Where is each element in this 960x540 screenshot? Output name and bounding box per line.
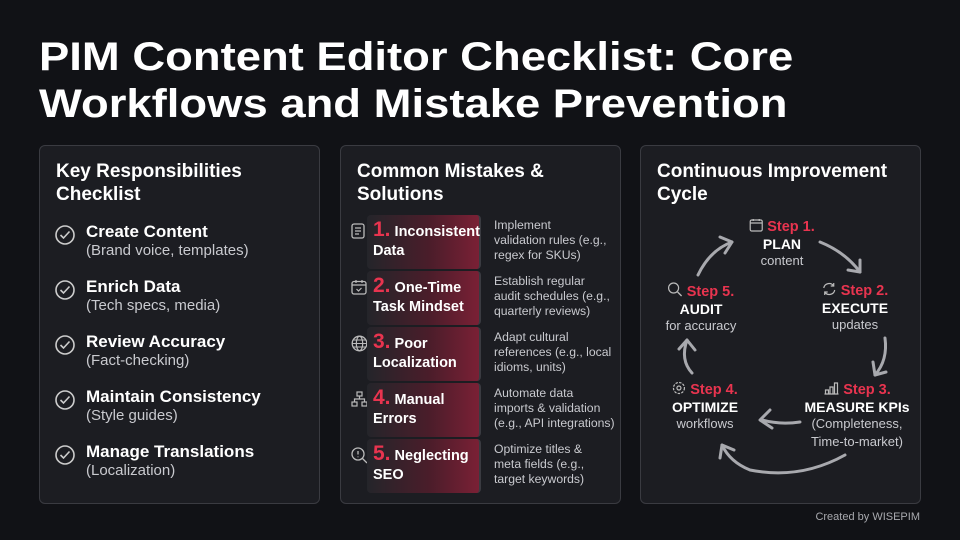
row 2: 2. One-Time Task Mindset	[373, 274, 464, 315]
step 2: updates	[832, 317, 878, 332]
heading: cycle: Cycle	[657, 184, 708, 205]
step 4: Step 4.	[690, 382, 738, 398]
step 5	[666, 282, 736, 333]
step 1	[750, 219, 815, 268]
title: Workflows and Mistake Prevention	[39, 82, 787, 126]
step 4: workflows	[676, 416, 734, 431]
step 3: MEASURE KPIs	[804, 398, 910, 414]
item: review accuracy	[55, 332, 226, 369]
panel: key responsibilities: Manage Translations	[86, 442, 254, 461]
row 1: regex for SKUs)	[494, 248, 581, 262]
row 5: target keywords)	[494, 472, 584, 486]
row 4: 4. Manual Errors	[373, 386, 444, 427]
title: PIM Content Editor Checklist: Core	[39, 35, 793, 79]
panel: key responsibilities: (Style guides)	[86, 407, 178, 424]
panel: key responsibilities: Maintain Consistency	[86, 387, 261, 406]
heading: mistakes	[357, 161, 544, 205]
row 2: audit schedules (e.g.,	[494, 289, 610, 303]
title	[39, 35, 793, 126]
row 4: Automate data	[494, 386, 573, 400]
row 5: Optimize titles &	[494, 442, 582, 456]
row 2: Establish regular	[494, 274, 585, 288]
heading: mistakes: Common Mistakes &	[357, 161, 544, 182]
row 3: 3. Poor Localization	[373, 330, 457, 371]
panel: key responsibilities: (Fact-checking)	[86, 352, 189, 369]
step 2: EXECUTE	[822, 300, 888, 316]
step 1: content	[761, 253, 803, 268]
panel: key responsibilities	[39, 145, 320, 504]
step 2: Step 2.	[841, 283, 888, 299]
heading: cycle: Continuous Improvement	[657, 161, 887, 182]
panel: key responsibilities: Review Accuracy	[86, 332, 225, 351]
heading: responsibilities	[56, 161, 242, 205]
item: manage translations	[55, 442, 254, 479]
row 1: 1. Inconsistent Data	[373, 218, 480, 259]
row 3: Adapt cultural	[494, 330, 569, 344]
step 5: for accuracy	[666, 318, 736, 333]
cycle arrows	[677, 236, 888, 474]
row 1: validation rules (e.g.,	[494, 233, 606, 247]
step 4: OPTIMIZE	[672, 398, 738, 414]
row 1: Implement	[494, 218, 551, 232]
row 2: quarterly reviews)	[494, 304, 590, 318]
panel: key responsibilities: (Localization)	[86, 462, 175, 479]
panel: key responsibilities: Enrich Data	[86, 277, 180, 296]
row 4	[351, 383, 615, 437]
step 1: Step 1.	[767, 219, 815, 235]
step 4	[672, 382, 738, 431]
row 3: references (e.g., local	[494, 345, 611, 359]
step 3: Step 3.	[843, 382, 891, 398]
step 1: PLAN	[763, 236, 801, 252]
step 5: Step 5.	[687, 284, 734, 300]
panel: continuous improvement	[640, 145, 921, 504]
row 2	[351, 271, 610, 325]
step 2	[822, 282, 888, 332]
row 3	[352, 327, 611, 381]
item: enrich data	[55, 277, 220, 314]
item: create content	[55, 222, 249, 259]
panel: common mistakes	[340, 145, 621, 504]
item: maintain consistency	[55, 387, 261, 424]
step 3: Time-to-market)	[811, 434, 903, 448]
heading: cycle	[657, 161, 887, 205]
panel: key responsibilities: (Brand voice, templates)	[86, 242, 249, 259]
footer credit: Created by WISEPIM	[815, 511, 920, 523]
heading: mistakes: Solutions	[357, 184, 444, 205]
step 3: (Completeness,	[811, 416, 903, 431]
step 5: AUDIT	[680, 300, 722, 316]
row 4: (e.g., API integrations)	[494, 416, 615, 430]
panel: key responsibilities: Create Content	[86, 222, 208, 241]
row 4: imports & validation	[494, 401, 600, 415]
step 3	[804, 382, 910, 448]
row 5: 5. Neglecting SEO	[373, 442, 469, 483]
row 5: meta fields (e.g.,	[494, 457, 584, 471]
heading: responsibilities: Checklist	[56, 184, 140, 205]
heading: responsibilities: Key Responsibilities	[56, 161, 242, 182]
row 1	[351, 215, 606, 269]
panel: key responsibilities: (Tech specs, media)	[86, 297, 220, 314]
row 3: idioms, units)	[494, 360, 566, 374]
row 5	[351, 439, 584, 493]
